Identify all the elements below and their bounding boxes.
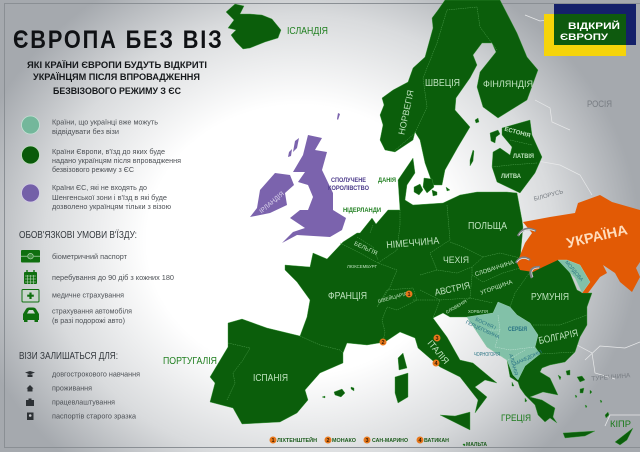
logo: Open Europe: ЄВРОПУ bbox=[560, 32, 608, 43]
label: Czechia: ЧЕХІЯ bbox=[443, 255, 469, 265]
item: old passports: паспортів старого зразка bbox=[52, 412, 136, 420]
Scandinavia bbox=[380, 0, 538, 185]
labels: Western Balkans: БОСНІЯ І bbox=[474, 317, 497, 331]
label: Ukraine: УКРАЇНА bbox=[565, 221, 629, 251]
label: Norway: НОРВЕГІЯ bbox=[396, 89, 416, 136]
condition: car insurance: (в разі подорожі авто) bbox=[52, 317, 125, 325]
Danish islands bbox=[414, 178, 450, 196]
label: Belarus: БІЛОРУСЬ bbox=[533, 189, 564, 203]
legend: visa required bbox=[22, 184, 171, 211]
icon: graduation cap bbox=[25, 371, 35, 377]
label: Cyprus bbox=[605, 415, 640, 429]
marker 3: San Marino bbox=[434, 334, 440, 342]
microstates key: САН-МАРИНО bbox=[372, 438, 409, 444]
label: Russia: РОСІЯ bbox=[587, 99, 612, 109]
marker 4: Vatican: 4 bbox=[434, 361, 438, 367]
labels: Slovenia and Croatia bbox=[445, 299, 488, 315]
label: Turkey: ТУРЕЧЧИНА bbox=[591, 372, 631, 383]
legend: visa-free now bbox=[22, 116, 158, 136]
labels: Western Balkans: ЧОРНОГОРІЯ bbox=[474, 352, 500, 358]
legend: visa-free after regime: безвізового режиму з ЄС bbox=[52, 166, 134, 174]
border arrows at Ukrainian frontier bbox=[516, 229, 540, 278]
labels: Baltic states: ЛИТВА bbox=[501, 174, 522, 180]
legend: visa-free after regime: Країни Європи, в'їзд до яких буде bbox=[52, 148, 165, 156]
legend: visa required: дозволено українцям тільки з візою bbox=[52, 203, 171, 211]
condition: stay length: перебування до 90 діб з кожних 180 bbox=[52, 274, 174, 282]
legend: visa required: Шенгенської зони і в'їзд в які буде bbox=[52, 194, 167, 202]
label: United Kingdom: КОРОЛІВСТВО bbox=[328, 185, 369, 192]
label: United Kingdom bbox=[328, 177, 369, 192]
condition: car insurance: страхування автомобіля bbox=[52, 308, 132, 316]
labels: Slovenia and Croatia: ХОРВАТІЯ bbox=[468, 309, 488, 314]
map of Europe bbox=[163, 0, 640, 446]
microstates key: МАЛЬТА bbox=[466, 442, 487, 448]
Baltic islands bbox=[470, 118, 500, 166]
legend: visa required: Країни ЄС, які не входять до bbox=[52, 184, 147, 192]
faint neighbouring borders: Russia, Belarus, Turkey bbox=[525, 15, 640, 379]
heading: entry conditions: ОБОВ'ЯЗКОВІ УМОВИ В'ЇЗДУ: bbox=[19, 229, 137, 241]
item: long-term study: довгострокового навчання bbox=[52, 372, 140, 378]
microstates key: 4 bbox=[418, 438, 422, 444]
marker 2: Monaco: 2 bbox=[381, 340, 385, 346]
microstates key: 1 bbox=[271, 438, 275, 444]
label: Cyprus: КІПР bbox=[610, 419, 631, 429]
icon: house bbox=[26, 385, 34, 392]
title: ЄВРОПА БЕЗ ВІЗ bbox=[13, 26, 222, 53]
country: Moldova bbox=[558, 260, 590, 293]
labels: Western Balkans: МАКЕДОНІЯ bbox=[514, 349, 544, 367]
label: Greece: ГРЕЦІЯ bbox=[501, 413, 531, 424]
label: United Kingdom: СПОЛУЧЕНЕ bbox=[331, 177, 367, 184]
label: Germany: НІМЕЧЧИНА bbox=[386, 236, 440, 251]
inner borders bbox=[227, 7, 587, 400]
marker 2: Monaco bbox=[380, 338, 386, 346]
labels: Baltic states bbox=[501, 127, 534, 180]
logo: Open Europe bbox=[544, 4, 636, 56]
countries with visa-free travel: Balkans bbox=[467, 302, 540, 380]
logo: Open Europe: ВІДКРИЙ bbox=[568, 20, 620, 32]
non-Schengen EU: United Kingdom bbox=[282, 113, 346, 243]
continental Europe bbox=[210, 158, 592, 424]
label: Iceland: ІСЛАНДІЯ bbox=[287, 26, 328, 37]
country: Ukraine bbox=[517, 195, 640, 293]
condition: medical insurance: медичне страхування bbox=[52, 292, 124, 300]
heading: visas remain for: ВІЗИ ЗАЛИШАТЬСЯ ДЛЯ: bbox=[19, 351, 118, 362]
marker 1: Liechtenstein bbox=[406, 290, 412, 298]
label: Ireland: ІРЛАНДІЯ bbox=[258, 190, 286, 215]
subtitle: БЕЗВІЗОВОГО РЕЖИМУ З ЄС bbox=[53, 86, 181, 96]
labels: Western Balkans: ГЕРЦЕГОВИНА bbox=[465, 320, 501, 341]
Baltic states bbox=[492, 120, 542, 193]
label: Sweden: ШВЕЦІЯ bbox=[425, 78, 460, 89]
marker 1: Liechtenstein: 1 bbox=[407, 292, 411, 298]
non-Schengen EU: Ireland bbox=[250, 173, 294, 217]
label: Romania: РУМУНІЯ bbox=[531, 292, 569, 303]
legend: visa-free now: Країни, що українці вже можуть bbox=[52, 118, 158, 126]
label: Finland: ФІНЛЯНДІЯ bbox=[483, 79, 533, 90]
marker 4: Vatican bbox=[432, 360, 440, 367]
label: Belgium: БЕЛЬГІЯ bbox=[353, 241, 378, 257]
label: Italy: ІТАЛІЯ bbox=[425, 338, 451, 366]
label: Bulgaria: БОЛГАРІЯ bbox=[538, 328, 579, 347]
labels: Baltic states: ЕСТОНІЯ bbox=[504, 127, 531, 139]
label: France: ФРАНЦІЯ bbox=[328, 291, 367, 302]
label: Luxembourg: ЛЮКСЕМБУРГ bbox=[347, 264, 378, 269]
label: Hungary: УГОРЩИНА bbox=[480, 279, 514, 297]
microstates key: ВАТИКАН bbox=[424, 438, 449, 444]
subtitle: УКРАЇНЦЯМ ПІСЛЯ ВПРОВАДЖЕННЯ bbox=[33, 72, 200, 82]
icon: biometric passport bbox=[21, 250, 40, 262]
subtitle: ЯКІ КРАЇНИ ЄВРОПИ БУДУТЬ ВІДКРИТІ bbox=[27, 60, 207, 70]
label: Slovakia: СЛОВАЧЧИНА bbox=[474, 260, 515, 278]
condition: car insurance bbox=[52, 308, 132, 325]
Iceland bbox=[226, 4, 281, 49]
label: Switzerland: ШВЕЙЦАРІЯ bbox=[377, 289, 408, 305]
labels: Western Balkans: АЛБАНІЯ bbox=[507, 353, 519, 376]
labels: Western Balkans: СЕРБІЯ bbox=[508, 327, 527, 333]
microstates key: 2 bbox=[326, 438, 330, 444]
microstates key bbox=[270, 436, 487, 448]
subtitle bbox=[27, 60, 207, 96]
labels: Western Balkans: МОЛДОВА bbox=[563, 260, 585, 283]
item: residence: проживання bbox=[52, 386, 92, 392]
Mediterranean islands bbox=[322, 353, 633, 446]
icon: car bbox=[23, 308, 39, 322]
item: employment: працевлаштування bbox=[52, 400, 115, 406]
microstates key: ЛІХТЕНШТЕЙН bbox=[277, 436, 317, 444]
labels: Western Balkans bbox=[465, 260, 585, 376]
label: Spain: ІСПАНІЯ bbox=[253, 373, 288, 384]
microstates key: 3 bbox=[365, 438, 369, 444]
icon: medical insurance bbox=[22, 290, 39, 302]
label: Netherlands: НІДЕРЛАНДИ bbox=[343, 207, 381, 214]
labels: Slovenia and Croatia: СЛОВЕНІЯ bbox=[445, 299, 468, 315]
label: Austria: АВСТРІЯ bbox=[434, 280, 471, 299]
label: Portugal: ПОРТУГАЛІЯ bbox=[163, 356, 217, 367]
icon: old passport bbox=[27, 412, 34, 420]
marker 3: San Marino: 3 bbox=[435, 336, 439, 342]
legend: visa-free now: відвідувати без візи bbox=[52, 128, 119, 136]
icon: briefcase bbox=[26, 398, 34, 406]
microstates key: МОНАКО bbox=[332, 438, 357, 444]
labels: Baltic states: ЛАТВІЯ bbox=[513, 154, 534, 160]
condition: passport: біометричний паспорт bbox=[52, 253, 128, 261]
legend: visa-free after regime bbox=[22, 146, 181, 174]
label: Poland: ПОЛЬЩА bbox=[468, 221, 507, 232]
label: Denmark: ДАНІЯ bbox=[378, 177, 396, 184]
icon: calendar bbox=[24, 270, 37, 284]
legend: visa-free after regime: надано українцям після впровадження bbox=[52, 157, 181, 165]
